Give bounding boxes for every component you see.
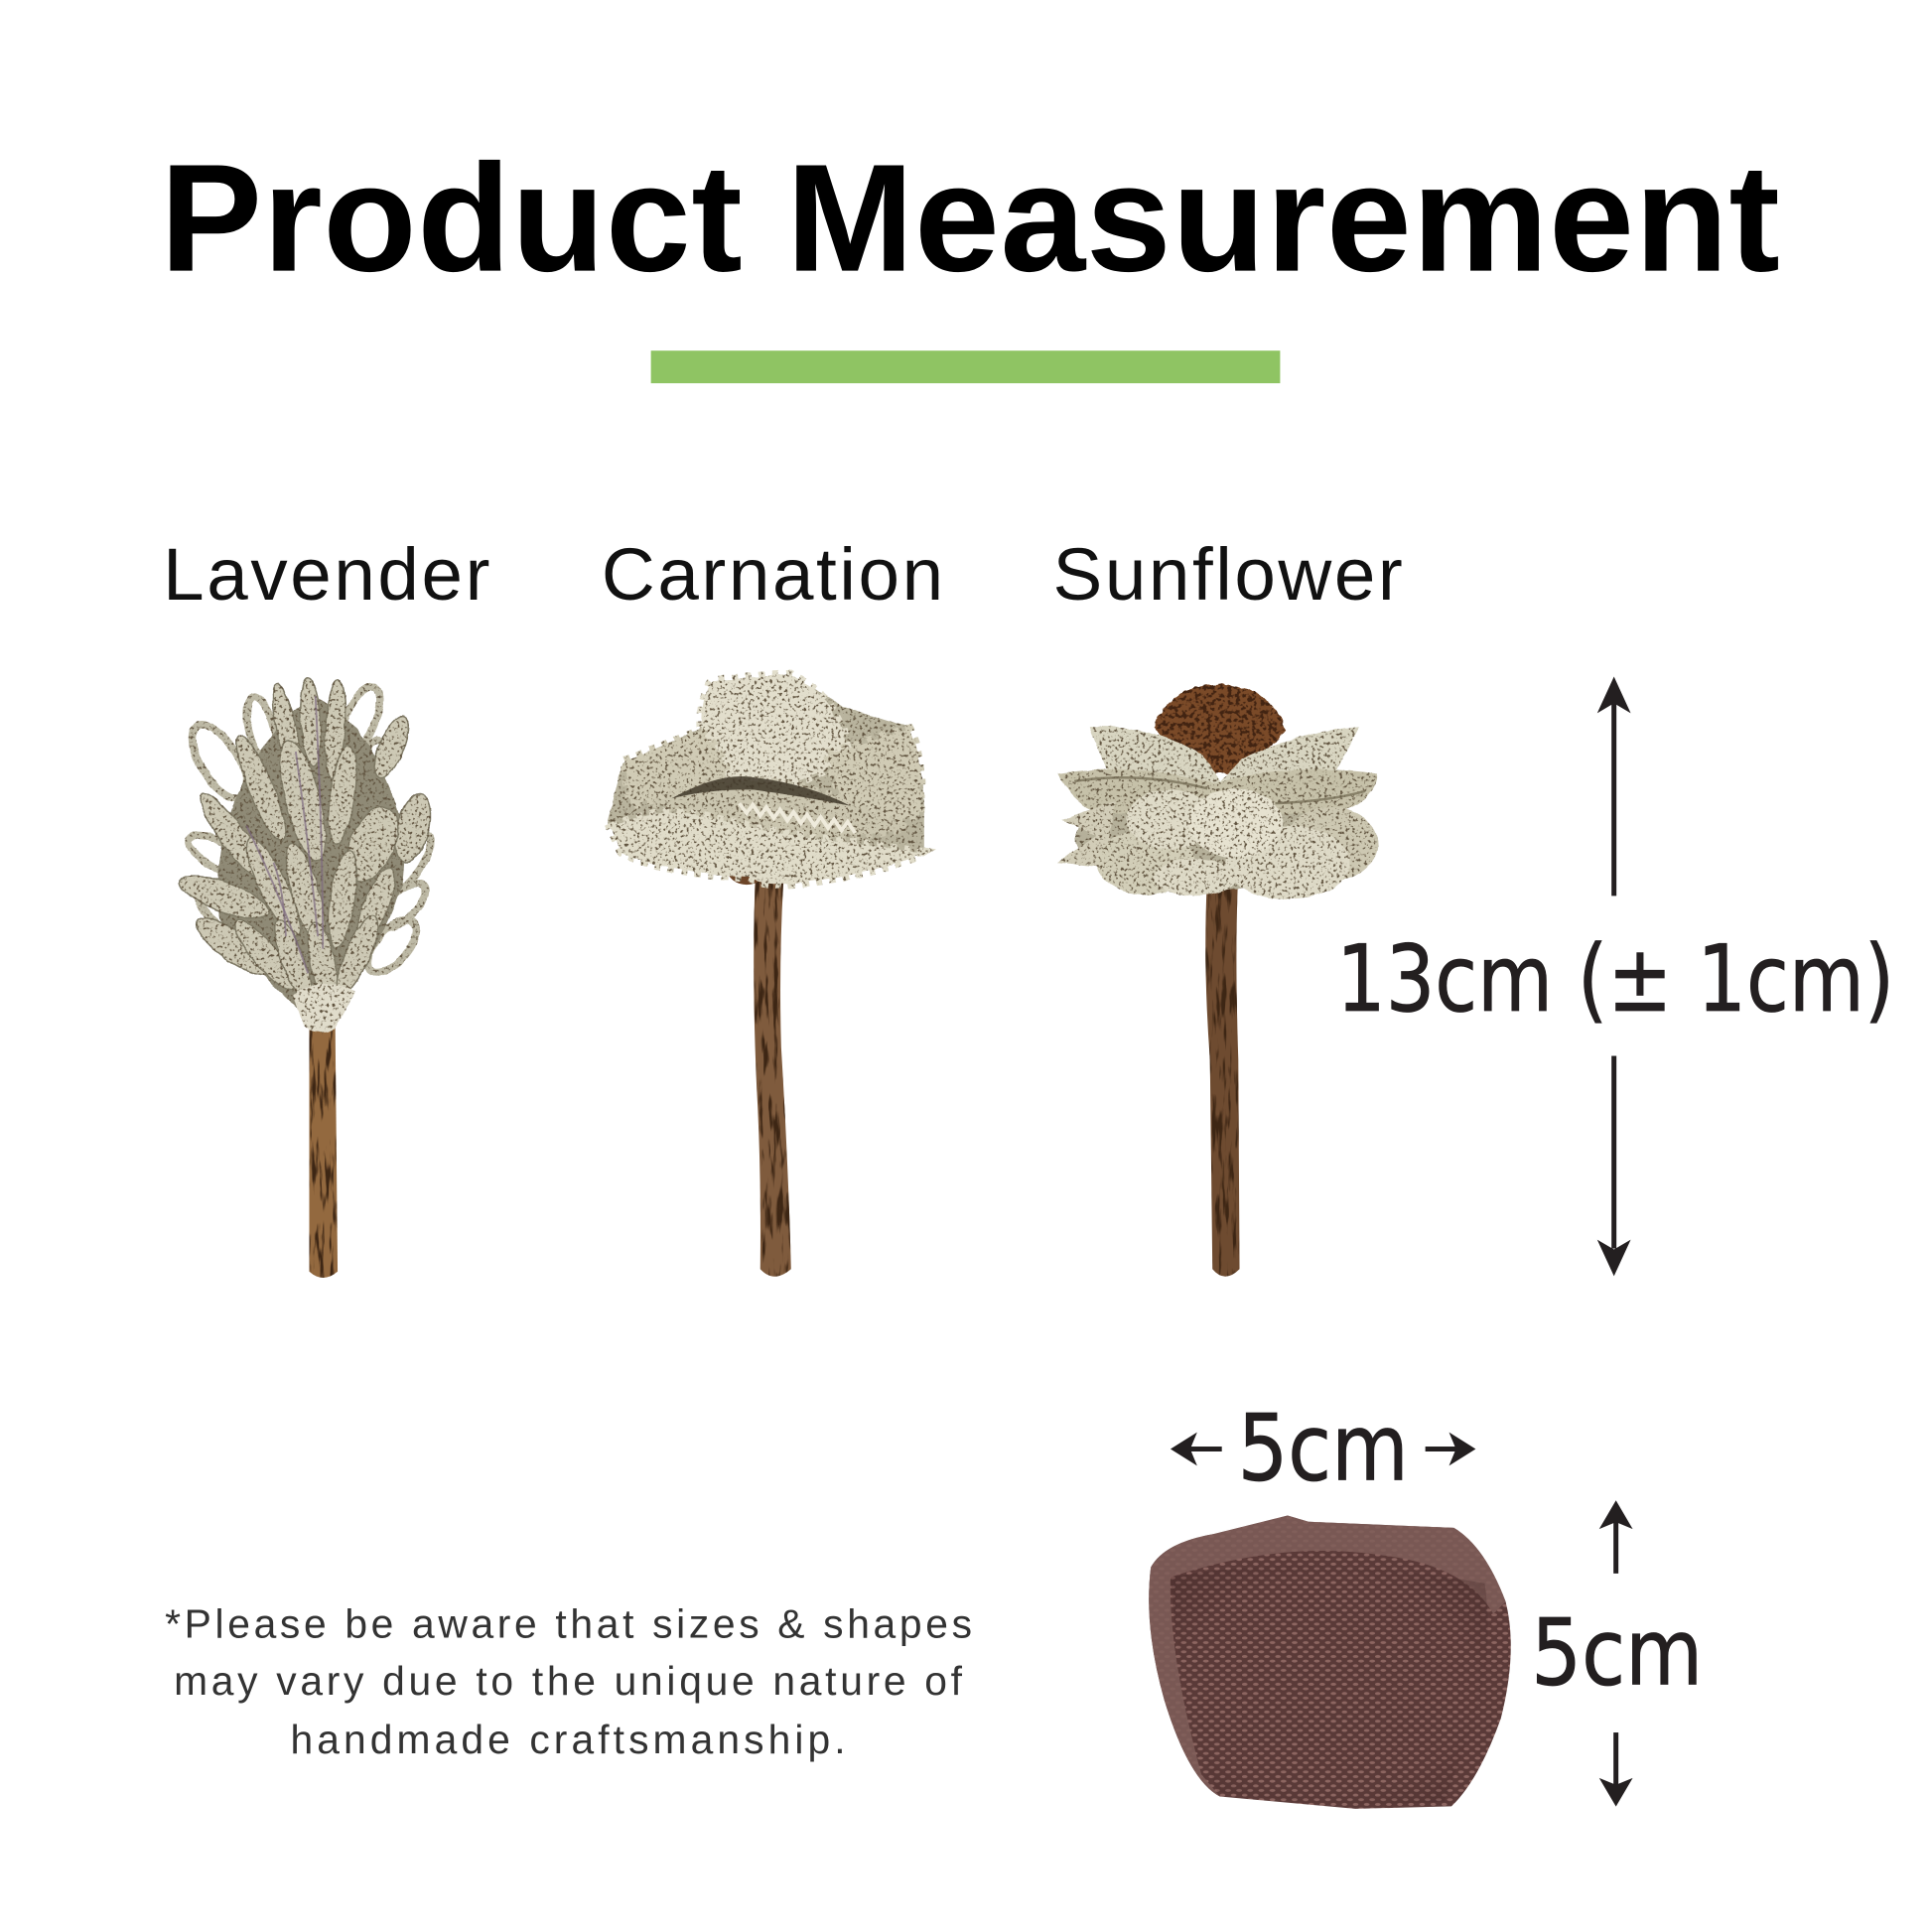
handmade disclaimer note bbox=[165, 1601, 972, 1762]
sunflower stem bbox=[1205, 873, 1240, 1277]
bag soft top and side band bbox=[1149, 1516, 1506, 1796]
carnation stem bbox=[754, 875, 791, 1277]
handmade disclaimer note: handmade craftsmanship. bbox=[291, 1717, 846, 1762]
lavender flower head bbox=[175, 677, 439, 1033]
height arrow: up bbox=[1597, 677, 1631, 896]
product: brown woven bag bbox=[1149, 1516, 1511, 1809]
height arrow: down bbox=[1597, 1056, 1631, 1276]
title: Product Measurement bbox=[160, 132, 1780, 304]
bag body bbox=[1149, 1516, 1511, 1809]
label: Lavender: Lavender bbox=[163, 532, 489, 616]
carnation folded shadow bbox=[671, 776, 850, 806]
sunflower brown centre bbox=[1154, 684, 1287, 773]
product: carnation stem and flower bbox=[608, 674, 924, 1277]
lavender purple veins bbox=[246, 696, 323, 973]
label: Carnation: Carnation bbox=[602, 532, 943, 616]
carnation flower head bbox=[608, 674, 924, 884]
bag width arrow: right bbox=[1426, 1433, 1475, 1465]
sunflower petal fold lines bbox=[1074, 777, 1365, 803]
bag height arrow: down bbox=[1599, 1732, 1633, 1807]
bag width text: 5cm bbox=[1238, 1394, 1409, 1501]
bag height arrow: up bbox=[1599, 1500, 1633, 1574]
carnation serrated teeth bbox=[740, 803, 855, 833]
handmade disclaimer note: may vary due to the unique nature of bbox=[174, 1658, 963, 1704]
label: Sunflower: Sunflower bbox=[1053, 532, 1403, 616]
handmade disclaimer note: *Please be aware that sizes & shapes bbox=[165, 1601, 972, 1647]
product: sunflower stem and flower bbox=[1057, 684, 1378, 1277]
bag width arrow: left bbox=[1171, 1433, 1222, 1465]
sunflower petals bbox=[1057, 727, 1378, 899]
green accent bar bbox=[651, 350, 1280, 383]
bag shading bbox=[1171, 1567, 1488, 1804]
product: lavender stem and flower bbox=[175, 677, 439, 1278]
bag height text: 5cm bbox=[1531, 1598, 1703, 1706]
lavender stem bbox=[310, 1017, 338, 1278]
carnation calyx bbox=[727, 853, 766, 885]
whole layout bbox=[160, 132, 1894, 1809]
